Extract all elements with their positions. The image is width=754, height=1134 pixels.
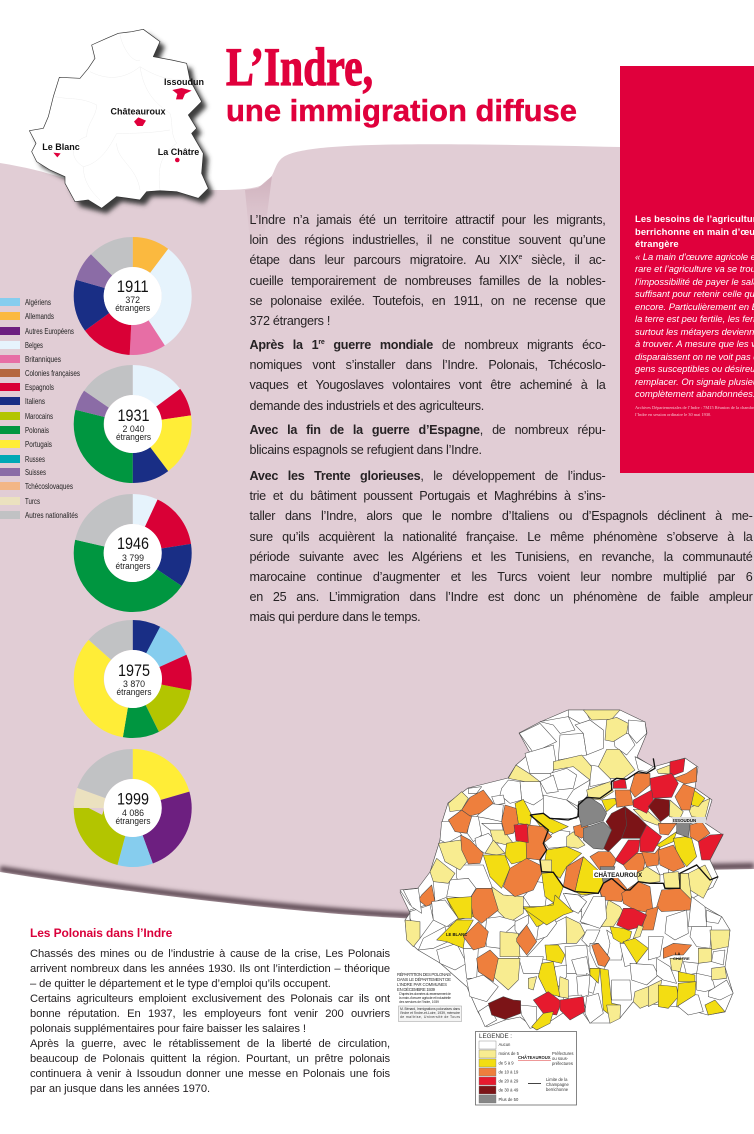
map legend: Champagne	[546, 1082, 569, 1087]
map shadow	[34, 34, 213, 213]
body text: Trente glorieuses: mais qui perdure dans le temps.	[250, 610, 420, 624]
pink background band	[0, 144, 754, 930]
body text: introduction	[250, 213, 606, 328]
donut 1931	[89, 380, 177, 468]
body text: after the First World War: demande des industriels et des agriculteurs.	[250, 399, 484, 413]
map caption: D’après les données du recensement de	[399, 992, 451, 996]
title	[226, 37, 577, 128]
legend: nationalities: Britanniques	[25, 355, 61, 364]
map legend: ou sous-	[552, 1056, 569, 1061]
body text: Spanish civil war: blicains espagnols se refugient dans l’Indre.	[250, 443, 482, 457]
legend: nationalities: Turcs	[25, 497, 40, 506]
map town labels: CHÂTRE	[673, 956, 690, 961]
donut 1931: 2 040	[122, 424, 145, 434]
body text: after the First World War: nomiques vont s’installer dans l’Indre. Polonais, Tchécoslo-	[250, 358, 606, 372]
town: La Châtre: La Châtre	[158, 147, 199, 157]
donut 1911	[89, 252, 177, 340]
town: Châteauroux: Châteauroux	[110, 106, 166, 116]
text block: Les Polonais dans l'Indre	[30, 948, 390, 1094]
body text: after the First World War: vaques et Yougoslaves volontaires vont être acheminé à la	[250, 378, 606, 392]
body text: introduction: L’Indre n’a jamais été un territoire attractif pour les migrants,	[250, 213, 606, 227]
body text: Trente glorieuses: Avec les Trente glorieuses, le développement de l’indus-	[250, 469, 605, 483]
map legend: Aucun	[498, 1042, 511, 1047]
map legend: berrichonne	[546, 1087, 569, 1092]
town: Le Blanc	[42, 142, 80, 157]
map silhouette	[400, 710, 733, 1030]
legend: nationalities: Autres nationalités	[25, 511, 78, 520]
legend: nationalities: Tchécoslovaques	[25, 482, 73, 491]
legend: nationalities: Colonies françaises	[25, 369, 80, 378]
text block: Les Polonais dans l'Indre: par an jusque dans les années 1970.	[30, 1082, 210, 1094]
text block: Les Polonais dans l'Indre: polonais supplémentaires pour faire baisser les salaires !	[30, 1022, 306, 1034]
dark edge above the lower white area	[0, 866, 754, 916]
body text: after the First World War: Après la 1re guerre mondiale de nombreux migrants éco-	[250, 338, 606, 352]
donut 1975: 3 870	[123, 679, 145, 689]
donut 1911: 1911	[117, 277, 149, 296]
body text: Trente glorieuses	[250, 469, 753, 624]
body text: Spanish civil war	[250, 423, 606, 457]
map caption: de maîtrise, Université de Tours	[400, 1015, 460, 1019]
legend: nationalities: Italiens	[25, 397, 45, 406]
map legend: de 5 à 9	[498, 1060, 514, 1066]
map town labels	[446, 817, 706, 961]
donut 1931: étrangers	[116, 432, 152, 442]
map legend: de 10 à 19	[498, 1070, 519, 1074]
red panel: agricultural needs	[620, 66, 754, 473]
donut 1946	[89, 509, 177, 597]
donut 1975: étrangers	[116, 687, 152, 697]
legend: nationalities: Portugais	[25, 440, 52, 449]
text block: Les Polonais dans l'Indre: – de quitter le département et le type d’emploi qu’ils occupent.	[30, 978, 331, 990]
body text: Trente glorieuses: période suivante avec les Algériens et les Tunisiens, en revanche, la communauté	[250, 550, 752, 564]
town: La Châtre	[158, 147, 199, 162]
map legend: Préfectures	[552, 1051, 573, 1056]
lower half of the map	[403, 888, 733, 1030]
map caption: l’Indre et l’Indre-et-Loire, 1939, mémoire	[400, 1011, 460, 1015]
body text: introduction: se polonaise exilée. Toutefois, en 1911, on ne recense que	[250, 294, 606, 308]
text block: Les Polonais dans l'Indre: arrivent nombreux dans les années 1930. Ils ont l’interdiction – théorique	[30, 962, 390, 974]
donut 1999	[89, 764, 177, 852]
map caption: EN DÉCEMBRE 1939	[397, 987, 436, 992]
map town labels: ISSOUDUN	[673, 818, 696, 823]
legend: nationalities: Russes	[25, 455, 45, 464]
lower white area	[0, 869, 754, 1134]
legend: nationalities	[0, 298, 80, 520]
body text: introduction: loin des régions industrielles, il ne constitue souvent qu’une	[250, 233, 606, 247]
legend: nationalities: Autres Européens	[25, 327, 74, 336]
map legend: LEGENDE :	[479, 1033, 512, 1040]
locator map of the Indre	[29, 29, 213, 213]
map legend: Limite de la	[546, 1077, 568, 1082]
map caption: M. Bénard, Immigrations polonaises dans	[400, 1007, 460, 1011]
donut 1931: 1931	[118, 406, 150, 425]
legend: nationalities: Marocains	[25, 412, 53, 421]
donut 1911: 372	[125, 295, 140, 305]
fold shadow under the white curve	[245, 176, 272, 262]
map caption: la main-d’œuvre agricole et industrielle	[399, 996, 451, 1000]
title: L’Indre,	[226, 37, 373, 97]
legend: nationalities: Polonais	[25, 426, 49, 435]
text block: Les Polonais dans l'Indre: beaucoup de Polonais quittent la région. Pourtant, un prêtre polonais	[30, 1052, 390, 1064]
donut 1999: 1999	[117, 790, 149, 808]
title: une immigration diffuse	[226, 93, 577, 128]
heading: Les Polonais dans l'Indre: Les Polonais dans l’Indre	[30, 926, 172, 940]
body text: introduction: 372 étrangers !	[250, 314, 330, 328]
legend: nationalities: Espagnols	[25, 383, 54, 392]
map legend: de 20 à 29	[498, 1078, 519, 1084]
body text: after the First World War	[250, 338, 606, 413]
map legend: moins de 5	[498, 1051, 520, 1056]
body text: introduction: cueille temporairement de nombreuses familles de la nobles-	[250, 274, 606, 288]
legend: nationalities: Allemands	[25, 312, 54, 321]
body text: Trente glorieuses: en 25 ans. L’immigration dans l’Indre est donc un phénomène de faible ampleur	[250, 590, 752, 604]
red panel: agricultural needs: Archives Départementales de l’Indre : 7M15 Réunion de la chambre	[635, 405, 754, 410]
red panel: agricultural needs: l’Indre en session ordinaire le 30 mai 1930.	[635, 412, 711, 417]
map legend: de 30 à 49	[498, 1088, 519, 1092]
upper half of the map	[400, 710, 723, 930]
commune map: Polish population in 1939	[397, 710, 733, 1105]
town: Issoudun: Issoudun	[164, 77, 204, 87]
map town labels: CHÂTEAUROUX	[594, 872, 643, 879]
town: Le Blanc: Le Blanc	[42, 142, 80, 152]
map town labels: LE BLANC	[446, 932, 467, 937]
town: Châteauroux	[110, 106, 166, 126]
donut 1946: 1946	[117, 534, 149, 553]
text block: Les Polonais dans l'Indre: Chassés des mines ou de l’industrie à cause de la crise, Les Polonais	[30, 948, 390, 960]
body text: Trente glorieuses: marocaine continue d’augmenter et les Turcs voient leur nombre multiplié par 6	[250, 570, 752, 584]
map caption	[397, 972, 462, 1022]
donut 1946: étrangers	[116, 561, 151, 571]
map caption: des services de l’Indre, 1939	[399, 1000, 439, 1004]
body text: Spanish civil war: Avec la fin de la guerre d’Espagne, de nombreux répu-	[250, 423, 606, 437]
donut 1999: étrangers	[116, 816, 151, 826]
map legend: préfectures	[552, 1061, 573, 1066]
text block: Les Polonais dans l'Indre: bonne réputation. En 1937, les employeurs font venir 200 ouvriers	[30, 1008, 390, 1020]
map legend: CHÂTEAUROUX	[518, 1055, 551, 1060]
body text: Trente glorieuses: sure qu’ils acquièrent la nationalité française. Le même phénomène s’observe à la	[250, 530, 752, 544]
donut 1946: 3 799	[122, 553, 144, 563]
map caption: RÉPARTITION DES POLONAIS	[397, 972, 451, 977]
body text: Trente glorieuses: taller dans l’Indre, alors que le nombre d’Italiens ou d’Espagnols déclinent à me-	[250, 509, 752, 523]
red panel: agricultural needs: étrangère	[635, 238, 679, 249]
body text: Trente glorieuses: trie et du bâtiment poussent Portugais et Maghrébins à s’ins-	[250, 489, 606, 503]
donut 1975: 1975	[118, 661, 150, 680]
legend: nationalities: Belges	[25, 341, 43, 350]
text block: Les Polonais dans l'Indre: continuera à venir à Issoudun donner une messe en Polonais une fois	[30, 1068, 390, 1080]
map caption: L’INDRE PAR COMMUNES	[397, 982, 447, 987]
donut 1975	[89, 635, 177, 723]
body text: introduction: étape dans leur parcours migratoire. Au XIXe siècle, il ac-	[250, 253, 606, 267]
map legend: Plus de 50	[498, 1097, 519, 1102]
map town labels: LA	[675, 951, 680, 956]
legend: nationalities: Suisses	[25, 468, 46, 477]
town: Issoudun	[164, 77, 204, 99]
donut 1999: 4 086	[122, 808, 144, 818]
map caption: DANS LE DÉPARTEMENT DE	[397, 977, 451, 982]
legend: nationalities: Algériens	[25, 298, 51, 307]
donut 1911: étrangers	[115, 303, 151, 313]
text block: Les Polonais dans l'Indre: Certains agriculteurs emploient exclusivement des Polonais car ils ont	[30, 992, 390, 1004]
text block: Les Polonais dans l'Indre: Après la guerre, avec le rétablissement de la liberté de circulation,	[30, 1038, 390, 1050]
map legend	[476, 1032, 576, 1105]
